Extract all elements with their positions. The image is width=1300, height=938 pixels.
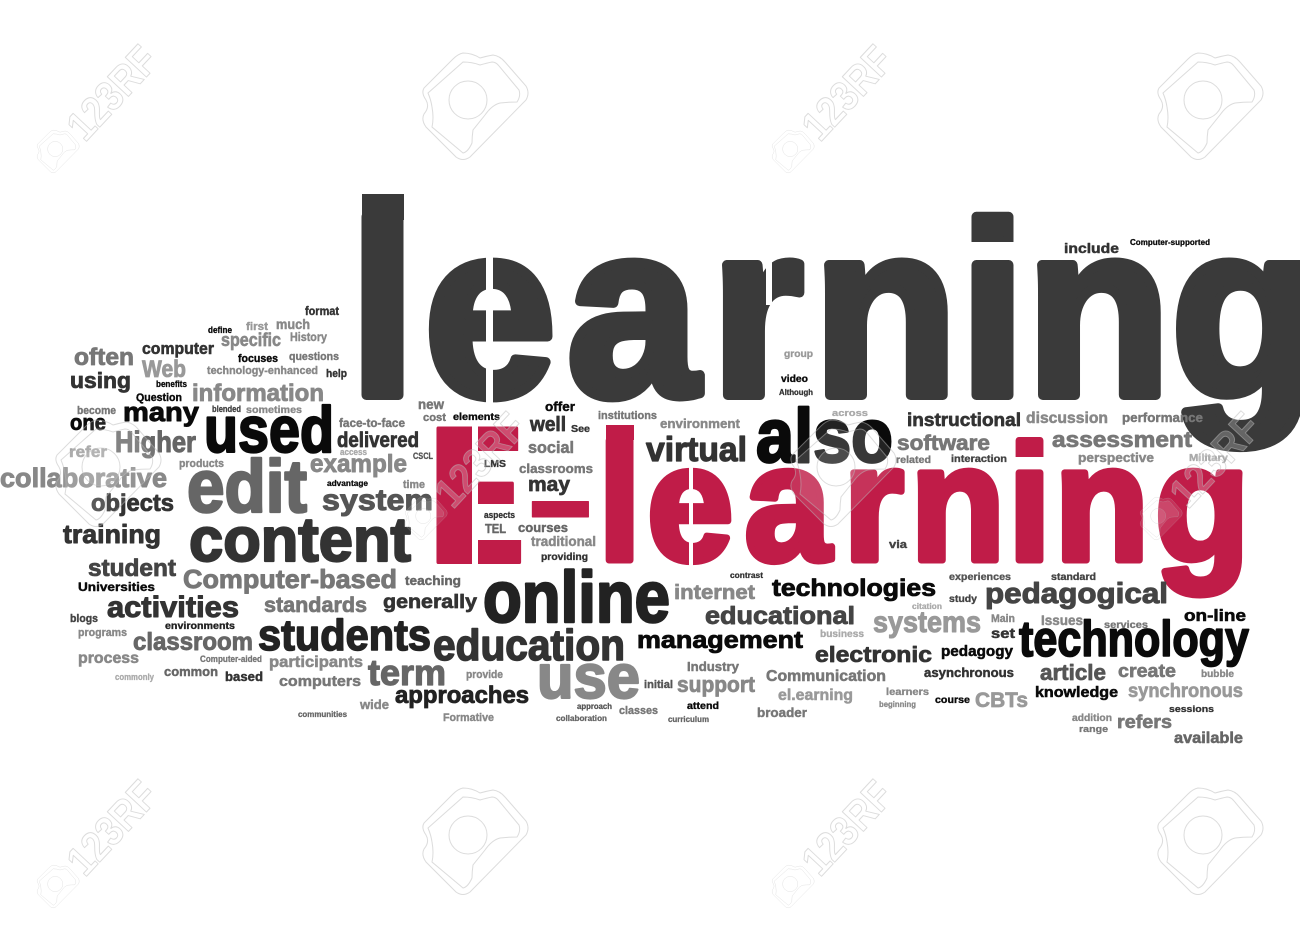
word group: lower right cluster: set	[991, 625, 1015, 641]
word group: lower centre cluster: support	[677, 672, 756, 697]
word group: upper left cluster: system	[322, 484, 433, 517]
word group: lower right cluster: systems	[873, 606, 981, 639]
word group: upper left cluster: Higher	[115, 426, 196, 459]
word: education: education	[433, 621, 625, 670]
watermark: repeated stock logos and emblems: 123RF	[1160, 404, 1270, 516]
word group: lower right cluster: standard	[1051, 572, 1096, 583]
word group: lower right cluster: synchronous	[1128, 681, 1243, 702]
word group: lower left cluster: standards	[264, 594, 367, 617]
watermark: repeated stock logos and emblems: 123RF	[57, 772, 167, 884]
word group: upper left cluster: many	[123, 397, 199, 427]
word group: centre cluster around E-learning: well	[529, 414, 566, 436]
word group: lower right cluster	[873, 572, 1246, 747]
word group: lower left cluster: based	[225, 669, 263, 684]
word group: lower centre cluster: broader	[757, 705, 807, 720]
word group: lower right cluster: pedagogy	[941, 643, 1014, 660]
word group: lower centre cluster: contrast	[730, 570, 763, 580]
word: online: online	[483, 558, 670, 638]
word group: lower centre cluster: management	[637, 627, 803, 654]
word group: centre cluster around E-learning: cost	[423, 412, 446, 424]
word group: lower left cluster: computers	[279, 673, 361, 690]
word group: upper left cluster: collaborative	[0, 463, 167, 493]
word group: upper left cluster: Question	[136, 392, 182, 404]
word group: centre cluster around E-learning: institutions	[598, 410, 657, 422]
word: also: also	[756, 394, 893, 479]
word group: centre cluster around E-learning: elements	[453, 412, 500, 423]
word group: centre cluster around E-learning: social	[528, 438, 574, 457]
word group: upper right cluster: software	[897, 432, 990, 455]
watermark: repeated stock logos and emblems: 123RF	[425, 404, 535, 516]
word group: upper left cluster: time	[403, 479, 425, 491]
word group: upper left cluster: much	[276, 316, 310, 332]
word group: lower right cluster: learners	[886, 687, 929, 698]
word group: upper right cluster	[896, 238, 1228, 466]
word: edit: edit	[187, 445, 307, 528]
word group: lower centre cluster: attend	[687, 700, 719, 712]
word group: lower centre cluster: Industry	[687, 659, 740, 674]
word group: lower left cluster: training	[63, 519, 161, 549]
word group: lower left cluster: teaching	[405, 573, 461, 588]
word: term: term	[368, 652, 446, 693]
word group: lower right cluster: article	[1040, 660, 1106, 685]
large word: E-learning in red: E	[428, 388, 525, 604]
word group: lower left cluster: student	[88, 555, 176, 582]
word group: centre cluster around E-learning: via	[889, 539, 908, 551]
word group: lower centre cluster: el.earning	[778, 687, 853, 704]
word group: upper right cluster: Military	[1189, 453, 1228, 464]
word group: upper left cluster: advantage	[327, 478, 368, 488]
word group: lower centre cluster	[443, 570, 936, 724]
word group: upper left cluster: access	[340, 447, 367, 457]
word group: centre cluster around E-learning: See	[571, 424, 590, 435]
word group: lower left cluster: Computer-based	[183, 564, 397, 594]
word group: upper left cluster: objects	[91, 490, 174, 517]
word group: upper left cluster: become	[77, 405, 116, 417]
word group: upper left cluster: often	[74, 344, 134, 371]
word group: centre cluster around E-learning: may	[528, 474, 571, 496]
word group: centre cluster around E-learning	[418, 349, 908, 563]
word group: lower right cluster: beginning	[879, 699, 916, 709]
word group: upper right cluster: performance	[1122, 410, 1203, 425]
word group: lower centre cluster: curriculum	[668, 714, 709, 724]
word group: lower centre cluster: approach	[577, 701, 612, 711]
word group: lower right cluster: addition	[1072, 713, 1112, 724]
word group: lower left cluster: activities	[107, 591, 239, 624]
word group: lower left cluster: approaches	[395, 682, 529, 709]
word group: lower centre cluster: Communication	[766, 668, 886, 685]
word group: lower centre cluster: business	[820, 629, 864, 640]
word group: lower right cluster: range	[1079, 724, 1108, 735]
word group: upper left cluster: benefits	[156, 379, 187, 389]
word group: upper left cluster: refer	[69, 444, 107, 461]
word group: lower left cluster: Universities	[78, 580, 155, 594]
word group: lower right cluster: Issues	[1041, 612, 1083, 628]
word group: upper left cluster: using	[70, 368, 131, 393]
word group: upper left cluster: first	[246, 321, 268, 333]
word group: upper right cluster: interaction	[951, 454, 1007, 465]
word: virtual: virtual	[646, 431, 747, 469]
watermark: repeated stock logos and emblems: 123RF	[57, 37, 167, 149]
word group: upper left cluster: define	[208, 325, 232, 335]
word group: upper left cluster: example	[310, 450, 407, 478]
word group: lower centre cluster: Formative	[443, 712, 494, 724]
word: technology: technology	[1019, 611, 1249, 667]
word group: upper left cluster: computer	[142, 339, 214, 358]
word group: upper left cluster: focuses	[238, 353, 278, 365]
word group: lower centre cluster: collaboration	[556, 713, 607, 723]
word group: upper left cluster: History	[290, 330, 327, 344]
word group: upper right cluster: instructional	[907, 410, 1021, 430]
word group: lower left cluster: participants	[269, 654, 363, 671]
word group: centre cluster around E-learning: LMS	[484, 459, 506, 470]
word group: centre cluster around E-learning: group	[784, 349, 813, 360]
word group: lower right cluster: create	[1118, 661, 1176, 681]
word group: lower centre cluster: classes	[619, 705, 658, 717]
word group: lower left cluster	[63, 519, 529, 719]
word: used: used	[204, 393, 334, 466]
word group: centre cluster around E-learning: aspects	[484, 510, 515, 520]
word group: lower right cluster: bubble	[1201, 668, 1234, 680]
word group: centre cluster around E-learning: Although	[779, 388, 813, 397]
word group: lower right cluster: available	[1174, 730, 1243, 747]
word group: lower centre cluster: technologies	[772, 575, 936, 602]
word group: centre cluster around E-learning: providing	[541, 552, 588, 563]
word group: lower right cluster: CBTs	[975, 689, 1028, 712]
word group: lower right cluster: course	[935, 695, 970, 706]
word group: upper left cluster: CSCL	[413, 451, 433, 461]
word group: lower left cluster: commonly	[115, 672, 154, 682]
word group: lower right cluster: experiences	[949, 572, 1011, 583]
word group: upper left cluster: questions	[289, 351, 339, 363]
word group: upper left cluster	[0, 304, 433, 517]
word group: lower centre cluster: electronic	[815, 642, 932, 667]
word group: lower left cluster: generally	[383, 592, 477, 613]
word group: lower left cluster: Computer-aided	[200, 654, 262, 664]
large word: E-learning in red: learning	[598, 411, 1250, 595]
watermark: repeated stock logos and emblems: 123RF	[792, 772, 902, 884]
word: content: content	[189, 506, 411, 575]
word group: lower left cluster: classroom	[133, 628, 253, 656]
word group: centre cluster around E-learning: traditional	[531, 533, 596, 549]
word group: upper right cluster: include	[1064, 240, 1119, 256]
word group: centre cluster around E-learning: courses	[518, 520, 568, 535]
word group: upper left cluster: products	[179, 458, 224, 470]
watermark: repeated stock logos and emblems: 123RF	[792, 37, 902, 149]
word group: lower left cluster: process	[78, 650, 139, 667]
large word: learning: learning	[350, 174, 1300, 448]
word group: lower left cluster: blogs	[70, 613, 98, 625]
large word: E-learning in red	[428, 388, 1250, 604]
word group: upper left cluster: format	[305, 304, 339, 318]
word group: upper left cluster: sometimes	[246, 405, 302, 416]
word group: lower centre cluster: educational	[705, 602, 855, 630]
word group: upper left cluster: one	[70, 410, 106, 435]
word group: upper left cluster: specific	[221, 330, 281, 350]
word group: upper right cluster: perspective	[1078, 450, 1154, 465]
word group: upper left cluster: delivered	[337, 429, 419, 452]
word group: upper right cluster: assessment	[1052, 427, 1193, 452]
word group: centre cluster around E-learning: across	[832, 408, 868, 419]
word group: lower centre cluster: internet	[674, 582, 755, 604]
word group: centre cluster around E-learning: new	[418, 396, 444, 412]
word group: lower left cluster: communities	[298, 709, 347, 719]
word group: lower right cluster: sessions	[1169, 704, 1214, 715]
word: use: use	[537, 643, 640, 712]
large word: E-learning in red: -	[524, 426, 597, 571]
word group: upper left cluster: blended	[212, 404, 241, 414]
word group: lower right cluster: on-line	[1184, 606, 1246, 625]
word group: lower right cluster: citation	[912, 602, 942, 611]
word group: centre cluster around E-learning: video	[781, 374, 808, 385]
word group: centre cluster around E-learning: TEL	[485, 521, 506, 536]
word group: lower centre cluster: initial	[644, 679, 673, 691]
word group: upper right cluster: Computer-supported	[1130, 238, 1210, 247]
word group: lower left cluster: wide	[359, 697, 389, 712]
word group: lower right cluster: study	[949, 594, 977, 605]
word group: lower left cluster: environments	[165, 621, 235, 632]
word group: lower right cluster: asynchronous	[924, 665, 1014, 680]
word group: lower left cluster: common	[164, 664, 218, 679]
word group: lower right cluster: services	[1104, 620, 1148, 631]
word group: centre cluster around E-learning: offer	[545, 399, 575, 414]
word group: upper right cluster: discussion	[1026, 410, 1108, 427]
word group: upper right cluster: related	[896, 455, 931, 466]
word group: upper left cluster: face-to-face	[339, 416, 405, 430]
word group: lower right cluster: knowledge	[1035, 684, 1118, 701]
word group: lower right cluster: refers	[1117, 712, 1172, 732]
word group: centre cluster around E-learning: classrooms	[519, 462, 593, 476]
word group: upper left cluster: information	[192, 380, 324, 407]
word group: lower right cluster: pedagogical	[985, 578, 1168, 610]
word group: upper left cluster: Web	[142, 356, 186, 383]
word group: lower left cluster: programs	[78, 627, 127, 639]
word group: upper left cluster: technology-enhanced	[207, 365, 318, 377]
word group: centre cluster around E-learning: environment	[660, 416, 741, 431]
word group: lower centre cluster: provide	[466, 669, 503, 681]
word group: lower right cluster: Main	[991, 613, 1015, 625]
word: students: students	[258, 611, 431, 660]
word group: upper left cluster: help	[326, 368, 347, 380]
